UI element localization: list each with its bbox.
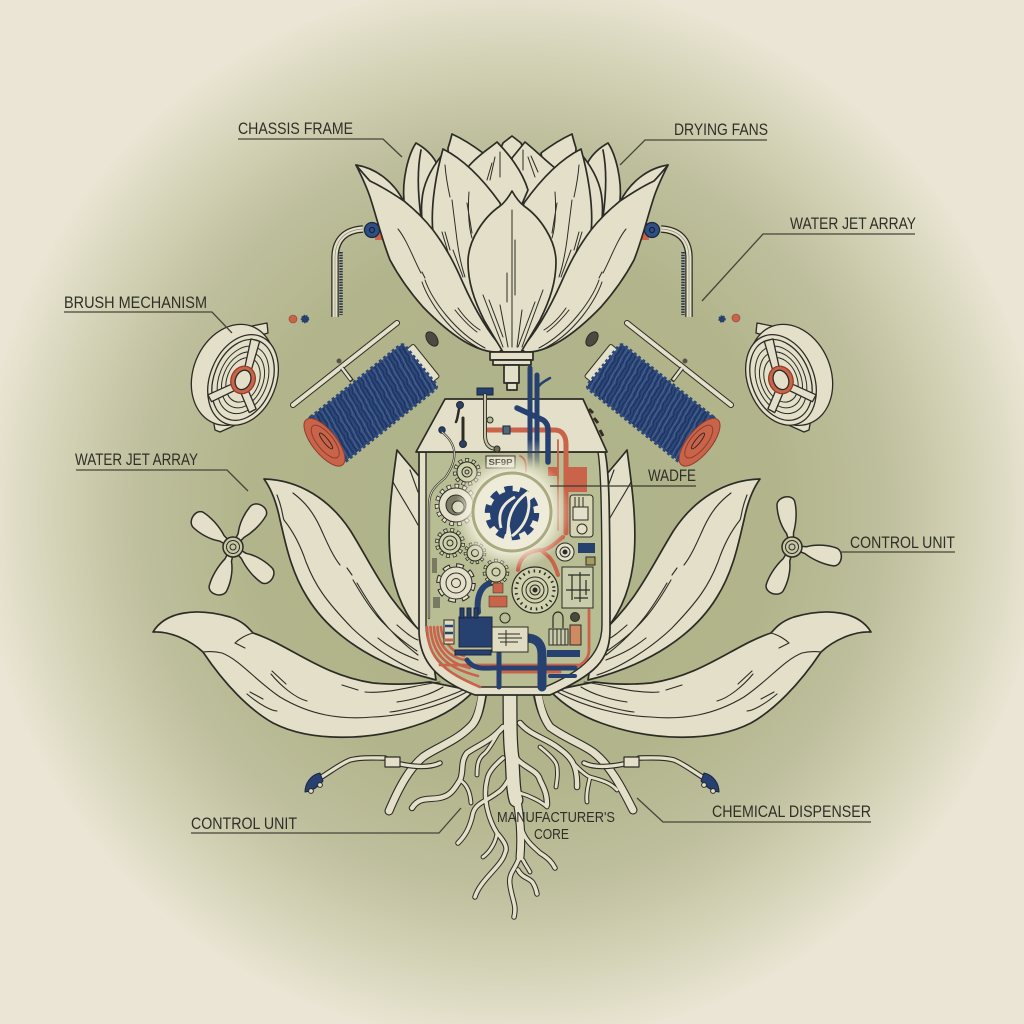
water jet pipe: right xyxy=(636,222,689,317)
leaves: left group xyxy=(153,450,474,737)
orange hub xyxy=(227,362,259,397)
orange valve xyxy=(503,426,510,434)
capacitor xyxy=(553,612,563,628)
part label xyxy=(486,456,515,468)
label: drying fans xyxy=(620,120,768,165)
side cable xyxy=(439,427,445,433)
spray nozzle xyxy=(305,773,323,792)
cap hardware xyxy=(429,388,510,618)
small fittings: right xyxy=(719,314,740,322)
label: manufacturer's core: MANUFACTURER'S xyxy=(497,809,615,826)
left stripes xyxy=(444,620,454,644)
gear body xyxy=(490,491,534,535)
orange blocks xyxy=(548,467,558,476)
curved pipe xyxy=(335,229,363,317)
washer ring xyxy=(500,613,510,623)
label: chassis frame xyxy=(238,119,402,157)
label: water jet array left: WATER JET ARRAY xyxy=(75,450,198,469)
comb teeth xyxy=(339,252,343,315)
gear: top xyxy=(455,460,479,484)
rod shaft xyxy=(293,323,397,405)
circuit box xyxy=(562,567,593,608)
leaves: right group xyxy=(550,450,871,737)
orange stack xyxy=(570,625,581,645)
leaf: small behind jar xyxy=(389,450,424,636)
jar cap xyxy=(416,399,607,452)
central jar body xyxy=(416,399,610,695)
fan housing: left xyxy=(177,312,293,440)
gears xyxy=(437,460,574,600)
concentric vents xyxy=(208,338,278,421)
jar inner xyxy=(426,452,602,687)
sprayer hose: right xyxy=(584,757,719,793)
inner top petal, right xyxy=(512,142,555,215)
medallion disc xyxy=(473,473,551,551)
radiator xyxy=(549,629,568,645)
label: drying fans: DRYING FANS xyxy=(674,120,768,139)
orange seal xyxy=(375,223,388,240)
orange end disc xyxy=(297,412,352,472)
label: chassis frame: CHASSIS FRAME xyxy=(238,119,353,138)
back petals, left half xyxy=(404,134,483,295)
hose coupling xyxy=(385,757,400,767)
dial wheel xyxy=(512,567,558,613)
small fittings: left xyxy=(289,315,308,323)
gear: right small xyxy=(556,543,574,561)
label: water jet array left xyxy=(75,450,248,491)
lotus flower xyxy=(356,134,668,390)
brush rod: right xyxy=(583,323,731,405)
leaf: lower xyxy=(153,612,474,737)
navy valve xyxy=(477,388,493,395)
brush roller: left xyxy=(297,338,445,472)
petal veins xyxy=(483,210,543,347)
root outline xyxy=(389,692,633,917)
gear: large cream xyxy=(439,566,473,600)
top and bottom lips xyxy=(230,323,268,340)
navy engine block xyxy=(455,608,492,655)
jar outer xyxy=(419,452,610,695)
cap rivets xyxy=(589,409,603,436)
label: manufacturer's core: CORE xyxy=(534,826,569,843)
navy bristles xyxy=(308,343,438,463)
root fill xyxy=(389,686,633,917)
back centre petal xyxy=(494,136,530,165)
cream end cap xyxy=(406,344,440,383)
wiring: navy xyxy=(467,368,575,687)
label: water jet array upper right xyxy=(702,214,916,301)
relay module xyxy=(570,495,593,537)
navy chip xyxy=(578,543,595,553)
housing face xyxy=(195,324,291,436)
medallion glow xyxy=(454,454,570,570)
gear: mid left xyxy=(437,530,463,556)
label: chemical dispenser: CHEMICAL DISPENSER xyxy=(712,802,871,821)
outer big petal xyxy=(356,165,503,352)
label: chemical dispenser xyxy=(637,798,871,822)
side strip xyxy=(432,558,437,573)
control box xyxy=(492,627,528,652)
sprayer hose: left xyxy=(305,757,440,793)
fan housing: right xyxy=(731,312,847,440)
navy label bar xyxy=(547,650,580,657)
gear: small xyxy=(466,544,484,562)
circuit modules xyxy=(432,456,595,657)
brush roller: right xyxy=(579,338,727,472)
part label: SF9P xyxy=(488,458,513,467)
label: control unit left xyxy=(191,808,461,833)
roots xyxy=(389,686,633,917)
inner top petal, left xyxy=(468,142,528,218)
brush rod: left xyxy=(293,323,441,405)
gear: lower centre xyxy=(484,560,508,584)
leaf: upper xyxy=(264,479,436,680)
spokes xyxy=(206,331,280,418)
label: brush mechanism: BRUSH MECHANISM xyxy=(64,293,207,312)
small orange labels xyxy=(493,583,503,593)
tan pipe xyxy=(485,395,497,449)
propeller: right xyxy=(764,496,843,597)
gear: large shaded xyxy=(437,486,475,524)
label: manufacturer's core xyxy=(497,809,615,843)
propeller: left xyxy=(187,500,278,598)
water jet pipe: left xyxy=(335,222,388,317)
small pod xyxy=(423,330,441,348)
central gear-leaf emblem xyxy=(454,454,570,570)
label: wadfe: WADFE xyxy=(648,466,696,485)
front centre petal xyxy=(468,191,556,352)
wiring: orange xyxy=(427,430,589,687)
leaf cut xyxy=(500,493,529,538)
pin and bolts xyxy=(456,405,460,422)
label: control unit left: CONTROL UNIT xyxy=(191,814,297,833)
label: water jet array upper right: WATER JET ARRAY xyxy=(790,214,916,233)
gear teeth xyxy=(488,489,536,537)
flower base xyxy=(490,352,533,360)
middle petals, left half xyxy=(432,149,506,340)
hose tube xyxy=(320,758,440,778)
rod fitting xyxy=(342,368,352,381)
label: brush mechanism xyxy=(64,293,232,333)
housing body xyxy=(177,312,290,438)
navy connector xyxy=(364,222,380,238)
label: control unit right: CONTROL UNIT xyxy=(850,533,955,552)
